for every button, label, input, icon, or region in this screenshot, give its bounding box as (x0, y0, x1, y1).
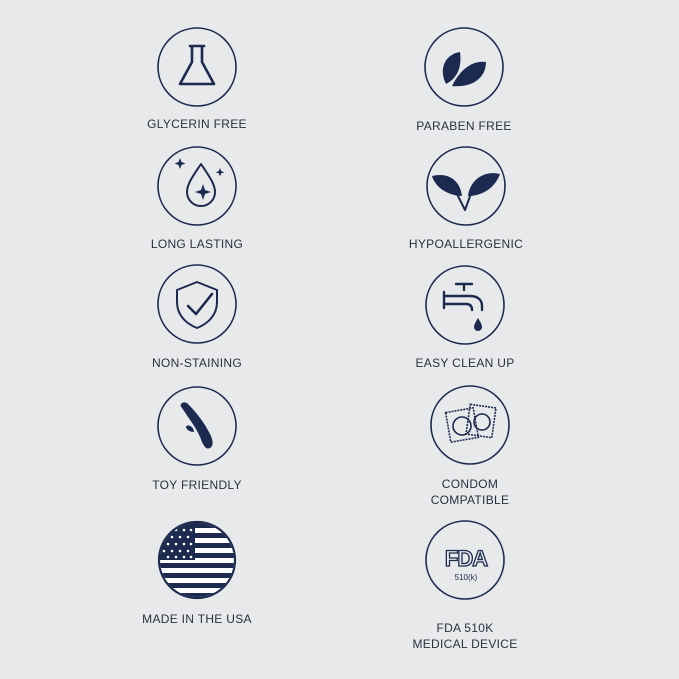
item: glycerin free (147, 28, 247, 131)
icon: leaves (443, 52, 486, 86)
item: toy friendly (152, 387, 242, 492)
icon: faucet (444, 284, 482, 310)
item: easy clean up (415, 266, 515, 370)
item: condom compatible: COMPATIBLE (431, 493, 509, 507)
item: condom compatible (431, 386, 509, 507)
icon: FDA logo: 510(k) (455, 573, 478, 582)
item: long lasting: LONG LASTING (151, 237, 243, 251)
icon: toy (181, 402, 213, 449)
icon: FDA logo: FDA (445, 546, 488, 571)
item: fda 510k: FDA 510K (436, 621, 494, 635)
icon: condom packets (446, 404, 496, 442)
item: made in the usa: MADE IN THE USA (142, 612, 252, 626)
item: hypoallergenic (409, 147, 523, 251)
item: toy friendly: TOY FRIENDLY (152, 478, 242, 492)
item: made in the usa (142, 520, 252, 626)
icon: flag circle (158, 520, 236, 600)
icon: drop with sparkles (187, 164, 215, 206)
item: condom compatible: CONDOM (442, 477, 498, 491)
item: non-staining: NON-STAINING (152, 356, 242, 370)
item: glycerin free: GLYCERIN FREE (147, 117, 247, 131)
item: non-staining (152, 265, 242, 370)
item: paraben free: PARABEN FREE (416, 119, 512, 133)
item: hypoallergenic: HYPOALLERGENIC (409, 237, 523, 251)
icon: sprout (432, 173, 500, 196)
item: long lasting (151, 147, 243, 251)
item: easy clean up: EASY CLEAN UP (415, 356, 515, 370)
item: fda 510k (412, 521, 518, 651)
icon: FDA logo (445, 546, 488, 582)
icon: shield (177, 282, 217, 328)
item: fda 510k: MEDICAL DEVICE (412, 637, 518, 651)
icon: flask (180, 46, 214, 84)
item: paraben free (416, 28, 512, 133)
